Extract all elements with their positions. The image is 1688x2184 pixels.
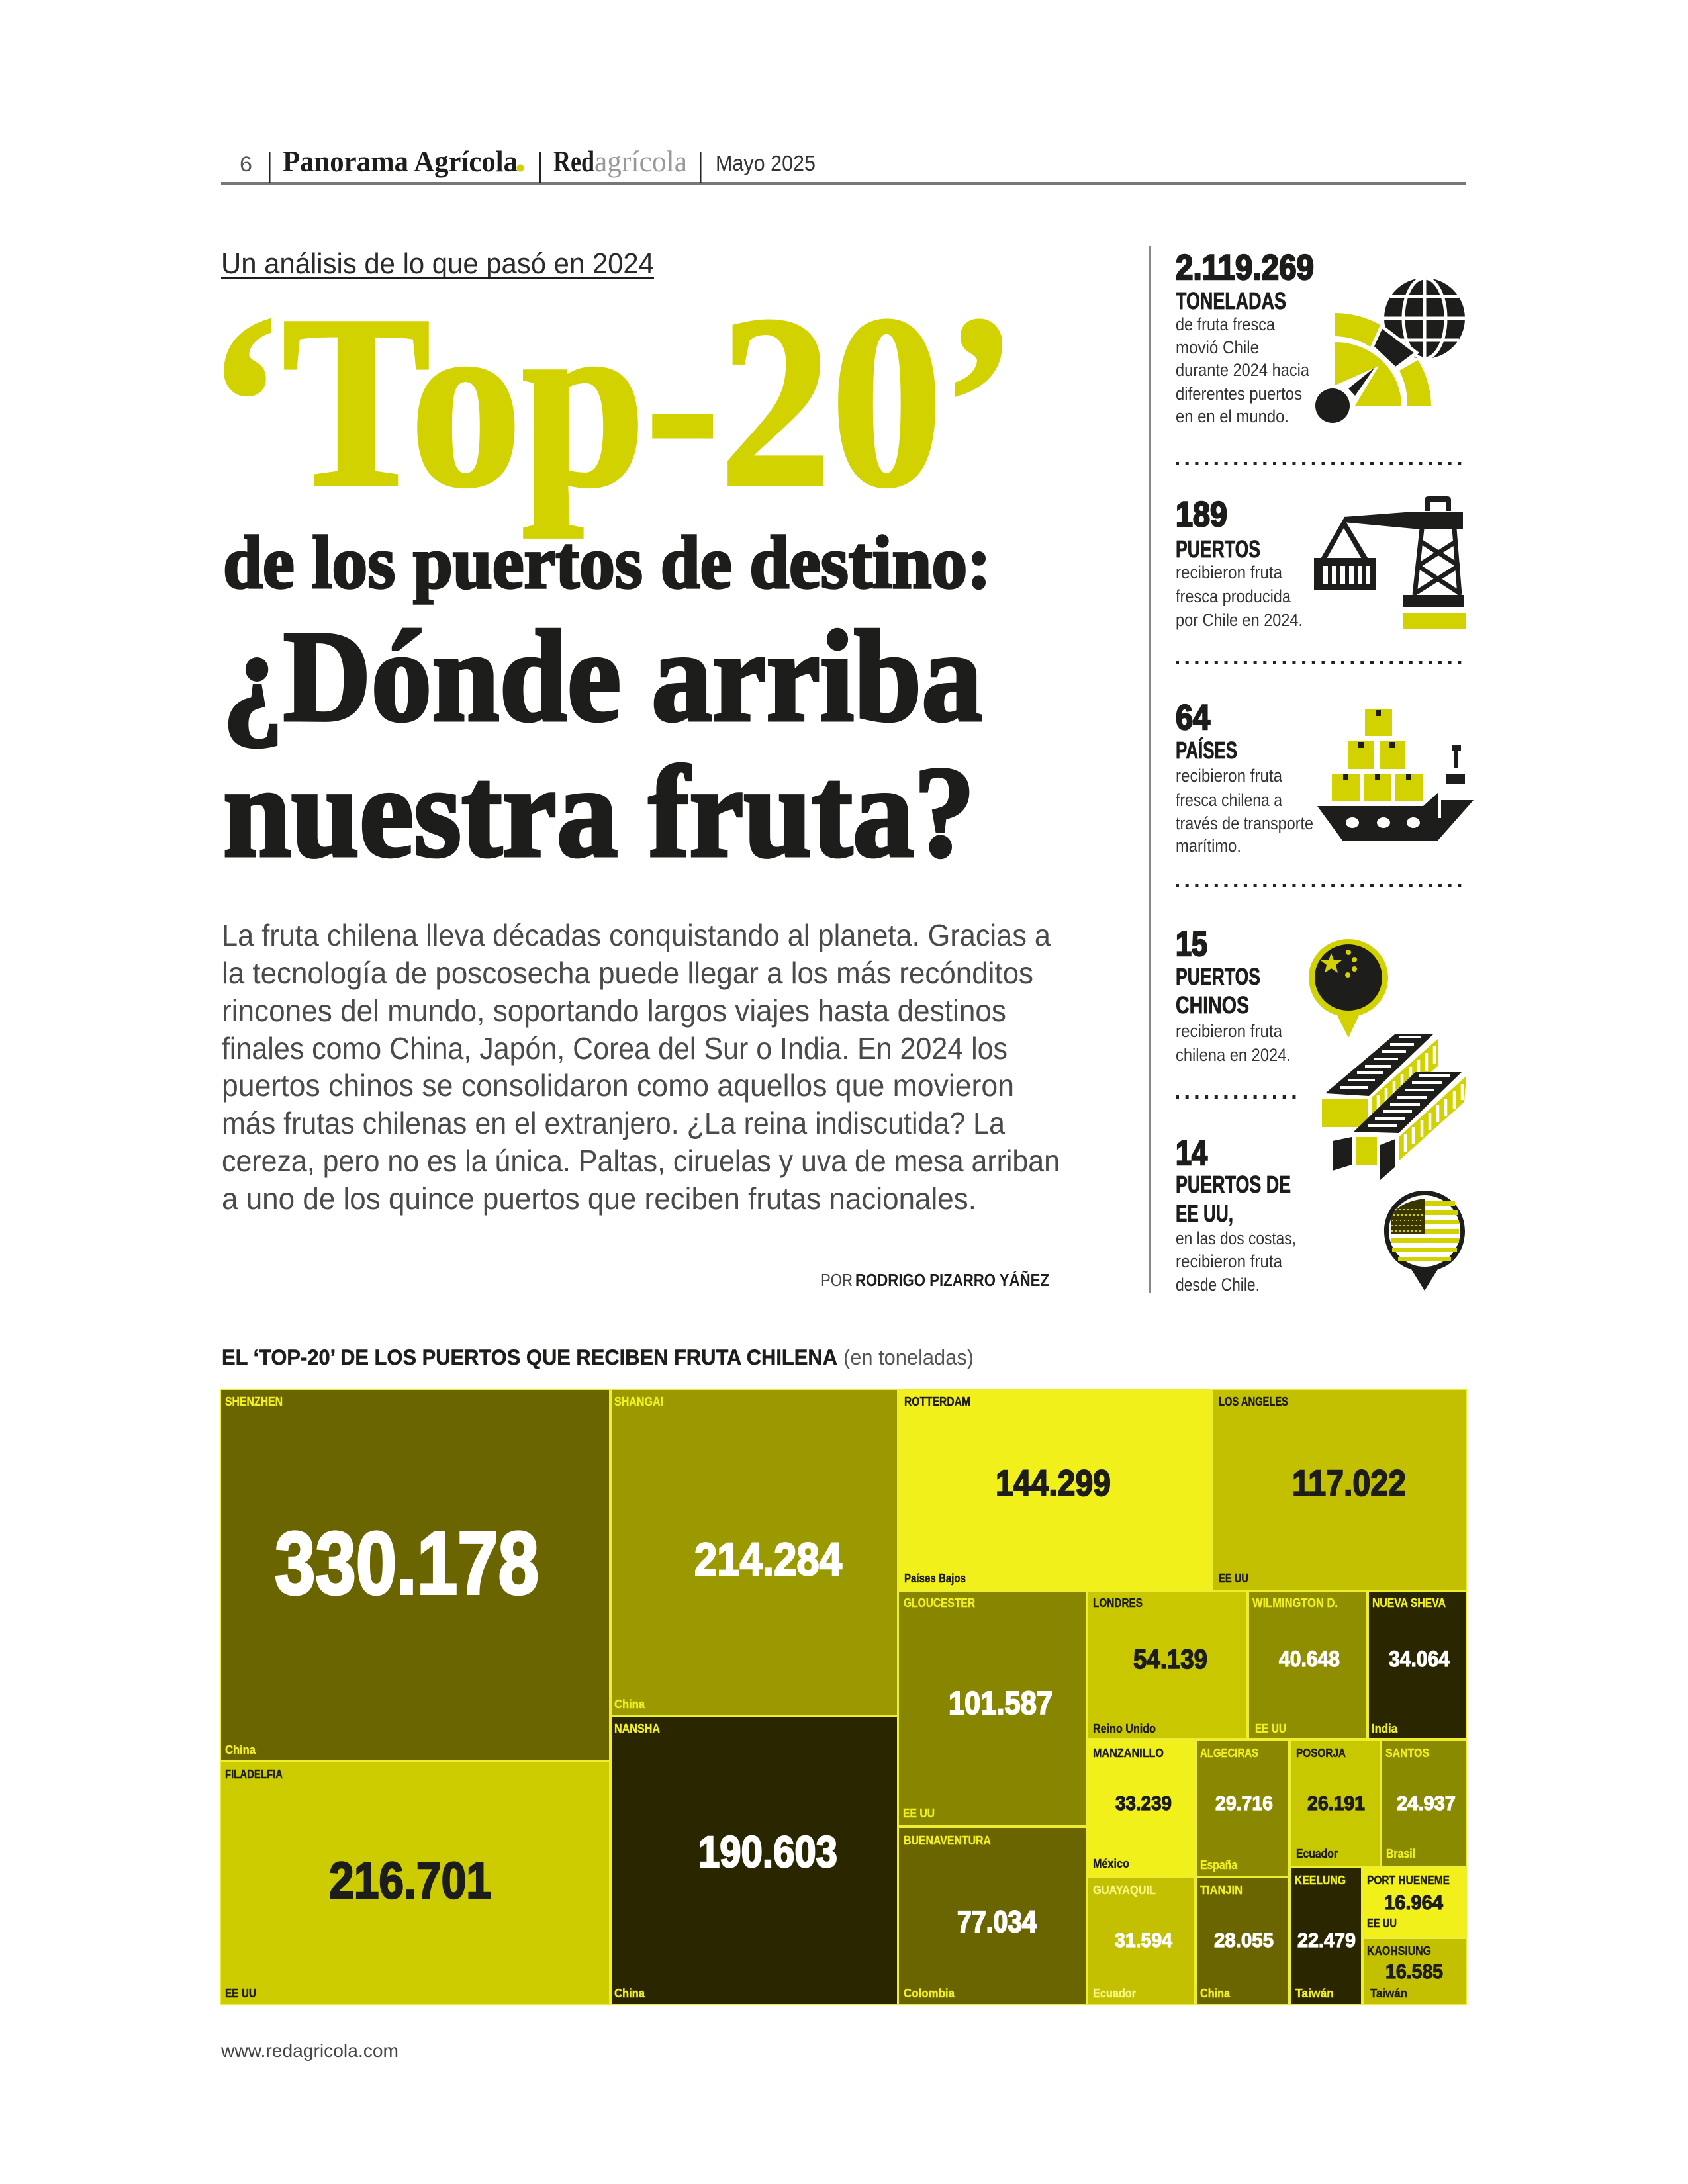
intro text: más frutas chilenas en el extranjero. ¿La reina indiscutida? La — [222, 1106, 1005, 1140]
cell: Filadelfia: 216.701 — [329, 1851, 491, 1909]
title: Top-20: ‘Top-20’ — [208, 265, 1017, 539]
divider — [1176, 462, 1465, 465]
cell: Los Angeles: LOS ANGELES — [1219, 1395, 1288, 1408]
cell: Rotterdam: 144.299 — [996, 1462, 1111, 1504]
cell: Gloucester: GLOUCESTER — [904, 1596, 975, 1610]
cell: Posorja — [1291, 1741, 1380, 1866]
icon: USA pin — [1384, 1191, 1465, 1291]
stat: 15 puertos chinos: recibieron fruta — [1176, 1021, 1283, 1041]
cell: Guayaquil: Ecuador — [1093, 1987, 1136, 2000]
stat: 2.119.269 toneladas: movió Chile — [1176, 338, 1259, 357]
stat: 64 países: PAÍSES — [1176, 737, 1237, 764]
cell: Filadelfia: FILADELFIA — [225, 1768, 283, 1781]
icon: crane with container — [1314, 496, 1466, 629]
intro text: puertos chinos se consolidaron como aquellos que movieron — [222, 1068, 1014, 1103]
byline: RODRIGO PIZARRO YÁÑEZ — [855, 1270, 1049, 1290]
cell: Nansha: China — [614, 1987, 645, 2000]
cell: Londres: 54.139 — [1133, 1643, 1207, 1674]
stat: 2.119.269 toneladas: de fruta fresca — [1176, 314, 1276, 334]
subtitle: de los puertos de destino: de los puertos de destino: — [223, 522, 991, 604]
stat: 15 puertos chinos: chilena en 2024. — [1176, 1045, 1291, 1065]
stat: 64 países: recibieron fruta — [1176, 766, 1283, 786]
cell: Kaohsiung: KAOHSIUNG — [1367, 1944, 1431, 1958]
stat: 189 puertos: por Chile en 2024. — [1176, 610, 1303, 630]
title: Dónde arriba nuestra fruta: nuestra fruta? — [223, 739, 975, 884]
cell: Santos: SANTOS — [1385, 1747, 1429, 1760]
sidebar: vertical rule — [1149, 246, 1151, 1293]
icon: China pin — [1309, 939, 1388, 1038]
cell: Kaohsiung — [1364, 1939, 1466, 2004]
cell: Tianjin: 28.055 — [1214, 1929, 1274, 1952]
cell: Nansha: 190.603 — [698, 1827, 837, 1877]
stat: 14 puertos de EE UU: PUERTOS DE — [1176, 1171, 1291, 1198]
page header: Red — [553, 145, 594, 178]
stat: 189 puertos: fresca producida — [1176, 586, 1291, 606]
stat: 189 puertos: recibieron fruta — [1176, 563, 1283, 582]
cell: Nueva Sheva: India — [1372, 1722, 1398, 1735]
stat: 14 puertos de EE UU — [1176, 1134, 1296, 1295]
divider — [1176, 661, 1465, 664]
cell: Los Angeles: EE UU — [1219, 1572, 1248, 1585]
page header — [221, 145, 1466, 185]
cell: Posorja: 26.191 — [1307, 1792, 1365, 1815]
cell: Los Angeles — [1213, 1390, 1466, 1590]
cell: Nueva Sheva — [1369, 1592, 1466, 1738]
cell: Rotterdam: ROTTERDAM — [904, 1395, 970, 1408]
intro text: cereza, pero no es la única. Paltas, ciruelas y uva de mesa arriban — [222, 1144, 1060, 1178]
stat: 189 puertos: PUERTOS — [1176, 535, 1260, 563]
cell: Gloucester — [899, 1592, 1086, 1825]
divider — [1176, 1095, 1299, 1099]
kicker: Un análisis de lo que pasó en 2024 — [221, 248, 654, 280]
cell: Port Hueneme: 16.964 — [1384, 1891, 1444, 1914]
cell: Wilmington: WILMINGTON D. — [1252, 1596, 1338, 1610]
cell: Wilmington: 40.648 — [1279, 1647, 1340, 1672]
title: Dónde arriba nuestra fruta — [222, 604, 982, 884]
stat: 64 países: través de transporte — [1176, 813, 1313, 833]
cell: Londres: Reino Unido — [1093, 1722, 1156, 1735]
intro text: La fruta chilena lleva décadas conquistando al planeta. Gracias a — [222, 918, 1051, 952]
page header: 6 — [240, 152, 252, 176]
cell: Tianjin: China — [1200, 1987, 1231, 2000]
page header: Panorama Agrícola — [283, 145, 518, 178]
intro text: a uno de los quince puertos que reciben frutas nacionales. — [222, 1181, 976, 1216]
cell: Guayaquil: 31.594 — [1115, 1929, 1173, 1952]
cell: Algeciras: ALGECIRAS — [1200, 1747, 1258, 1760]
stat: 15 puertos chinos — [1176, 925, 1291, 1065]
cell: Los Angeles: 117.022 — [1292, 1462, 1406, 1504]
cell: Guayaquil: GUAYAQUIL — [1093, 1884, 1156, 1897]
cell: Londres — [1088, 1592, 1246, 1738]
cell: Gloucester: EE UU — [903, 1807, 935, 1820]
divider — [1176, 884, 1465, 887]
cell: Keelung — [1291, 1868, 1361, 2004]
cell: Buenaventura: Colombia — [904, 1987, 955, 2000]
icon: cargo ship — [1317, 709, 1474, 841]
stat: 15 puertos chinos: CHINOS — [1176, 991, 1249, 1019]
cell: Manzanillo: 33.239 — [1115, 1792, 1172, 1815]
byline: POR — [821, 1270, 853, 1290]
cell: Nansha — [612, 1717, 897, 2004]
cell: Port Hueneme: PORT HUENEME — [1367, 1874, 1450, 1887]
cell: Wilmington: EE UU — [1255, 1722, 1286, 1735]
cell: Nueva Sheva: 34.064 — [1389, 1647, 1450, 1672]
cell: Algeciras — [1197, 1741, 1288, 1876]
treemap chart — [220, 1389, 1467, 2005]
intro text — [222, 918, 1060, 1216]
intro text: rincones del mundo, soportando largos viajes hasta destinos — [222, 993, 1006, 1028]
stat: 14 puertos de EE UU: EE UU, — [1176, 1200, 1233, 1227]
cell: Shenzhen: SHENZHEN — [225, 1395, 283, 1408]
cell: Shangai: 214.284 — [694, 1533, 842, 1585]
stat: 14 puertos de EE UU: desde Chile. — [1176, 1275, 1260, 1295]
stat: 2.119.269 toneladas: diferentes puertos — [1176, 384, 1302, 404]
cell: Keelung: Taiwán — [1295, 1987, 1334, 2000]
stat: 14 puertos de EE UU: recibieron fruta — [1176, 1251, 1283, 1271]
stat: 14 puertos de EE UU: en las dos costas, — [1176, 1228, 1296, 1248]
cell: Nueva Sheva: NUEVA SHEVA — [1372, 1596, 1446, 1610]
stat: 2.119.269 toneladas: durante 2024 hacia — [1176, 360, 1310, 380]
cell: Buenaventura: BUENAVENTURA — [904, 1834, 991, 1847]
cell: Keelung: KEELUNG — [1295, 1874, 1346, 1887]
stat: 2.119.269 toneladas: en en el mundo. — [1176, 406, 1289, 426]
icon: containers — [1322, 1034, 1466, 1180]
cell: Manzanillo: MANZANILLO — [1093, 1747, 1164, 1760]
cell: Buenaventura — [899, 1828, 1086, 2004]
cell: Londres: LONDRES — [1093, 1596, 1143, 1610]
stat: 15 puertos chinos: 15 — [1176, 925, 1207, 964]
cell: Filadelfia — [221, 1762, 609, 2004]
cell: Keelung: 22.479 — [1297, 1929, 1356, 1952]
cell: Santos: 24.937 — [1397, 1792, 1456, 1815]
cell: Manzanillo — [1088, 1741, 1194, 1876]
cell: Port Hueneme — [1364, 1868, 1466, 1936]
cell: Algeciras: España — [1200, 1858, 1238, 1872]
cell: Santos: Brasil — [1386, 1847, 1415, 1860]
cell: Filadelfia: EE UU — [225, 1987, 256, 2000]
cell: Buenaventura: 77.034 — [957, 1905, 1037, 1938]
cell: Shenzhen: China — [225, 1743, 256, 1756]
footer url: www.redagricola.com — [220, 2040, 399, 2061]
intro text: finales como China, Japón, Corea del Sur o India. En 2024 los — [222, 1031, 1008, 1066]
cell: Nansha: NANSHA — [614, 1722, 660, 1735]
cell: Algeciras: 29.716 — [1215, 1792, 1273, 1815]
title: Dónde arriba nuestra fruta: ¿Dónde arriba — [222, 604, 982, 749]
cell: Shangai — [612, 1390, 897, 1715]
stat: 14 puertos de EE UU: 14 — [1176, 1134, 1207, 1173]
stat: 189 puertos: 189 — [1176, 495, 1227, 534]
cell: Wilmington — [1249, 1592, 1366, 1738]
cell: Kaohsiung: 16.585 — [1385, 1960, 1443, 1983]
stat: 64 países — [1176, 698, 1313, 856]
cell: Tianjin: TIANJIN — [1200, 1884, 1243, 1897]
intro text: la tecnología de poscosecha puede llegar a los más recónditos — [222, 956, 1033, 990]
stat: 2.119.269 toneladas: 2.119.269 — [1176, 248, 1314, 287]
cell: Tianjin — [1197, 1878, 1288, 2004]
page header: agrícola — [594, 145, 687, 178]
cell: Rotterdam: Países Bajos — [904, 1572, 966, 1585]
stat: 15 puertos chinos: PUERTOS — [1176, 963, 1260, 990]
page header: Mayo 2025 — [716, 151, 816, 175]
cell: Guayaquil — [1088, 1878, 1194, 2004]
stat: 2.119.269 toneladas — [1176, 248, 1314, 426]
stat: 64 países: marítimo. — [1176, 836, 1241, 856]
cell: Shenzhen — [221, 1390, 609, 1760]
cell: Port Hueneme: EE UU — [1367, 1917, 1397, 1930]
treemap title: (en toneladas) — [843, 1345, 974, 1369]
cell: Santos — [1382, 1741, 1466, 1866]
cell: Shangai: China — [614, 1698, 645, 1711]
stat: 2.119.269 toneladas: TONELADAS — [1176, 287, 1286, 314]
stat: 64 países: 64 — [1176, 698, 1210, 737]
cell: Gloucester: 101.587 — [949, 1686, 1053, 1721]
cell: Shenzhen: 330.178 — [275, 1514, 539, 1613]
stat: 64 países: fresca chilena a — [1176, 790, 1283, 810]
treemap title: EL ‘TOP-20’ DE LOS PUERTOS QUE RECIBEN FRUTA CHILENA — [222, 1345, 837, 1369]
cell: Shangai: SHANGAI — [614, 1395, 663, 1408]
cell: Posorja: Ecuador — [1296, 1847, 1338, 1860]
stat: 189 puertos — [1176, 495, 1303, 630]
icon: globe and gauge — [1315, 278, 1465, 423]
cell: Manzanillo: México — [1093, 1857, 1129, 1870]
cell: Rotterdam — [899, 1390, 1210, 1590]
cell: Kaohsiung: Taiwán — [1370, 1987, 1407, 2000]
cell: Posorja: POSORJA — [1296, 1747, 1346, 1760]
